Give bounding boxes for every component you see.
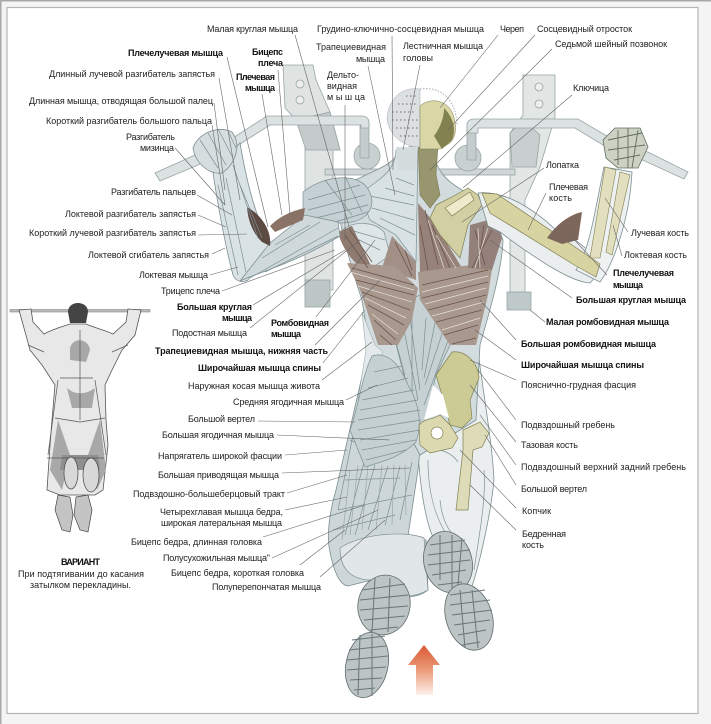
oblique (358, 312, 383, 400)
labels: right: Пояснично-грудная фасция (521, 380, 636, 390)
variant shading (50, 340, 106, 490)
left arm (193, 129, 340, 282)
labels: left and top: Седьмой шейный позвонок (555, 39, 667, 49)
ischium (419, 415, 458, 453)
left forearm (213, 143, 272, 282)
labels: right: кость (549, 193, 572, 203)
radius and ulna (590, 167, 630, 258)
labels: left and top: Длинная мышца, отводящая большой палец (29, 96, 213, 106)
labels: left and top: Локтевая мышца (139, 270, 208, 280)
labels: left and top: мышца (356, 54, 385, 64)
labels: left and top: мышца (245, 83, 276, 93)
variant caption (18, 557, 144, 590)
labels: right (521, 83, 689, 550)
labels: right: Подвздошный верхний задний гребень (521, 462, 686, 472)
cervical spine (418, 143, 440, 208)
left shank (340, 534, 428, 596)
labels: left and top: мышца (271, 329, 302, 339)
variant caption: ВАРИАНТ (61, 557, 100, 567)
brachialis (247, 207, 270, 246)
labels: left and top: Большой вертел (188, 414, 255, 424)
left hand (193, 129, 237, 173)
left leg (328, 350, 428, 597)
labels: right: Широчайшая мышца спины (521, 360, 644, 370)
labels: left and top: Напрягатель широкой фасции (158, 451, 282, 461)
brachioradialis (547, 212, 582, 244)
sole tread (347, 535, 492, 696)
labels: right: Подвздошный гребень (521, 420, 615, 430)
leader lines (175, 35, 628, 577)
triceps fibres and forearm fibres (218, 165, 338, 278)
ilium (436, 352, 479, 428)
labels: right: Бедренная (522, 529, 566, 539)
right leg shading (420, 449, 484, 570)
glute (350, 355, 421, 467)
variant caption: затылком перекладины. (30, 580, 131, 590)
labels: left and top: плеча (258, 58, 284, 68)
fibres (345, 210, 492, 345)
biceps (270, 208, 305, 232)
right teres (468, 218, 502, 270)
figure: main pull-up anatomy (193, 89, 648, 702)
head and skull (387, 89, 457, 170)
humerus (482, 193, 600, 277)
labels: left and top: Длинный лучевой разгибатель запястья (49, 69, 215, 79)
labels: left and top: Средняя ягодичная мышца (233, 397, 344, 407)
labels: left and top: Локтевой сгибатель запястья (88, 250, 209, 260)
labels: right: Ключица (573, 83, 609, 93)
labels: left and top: Грудино-ключично-сосцевидная мышца (317, 24, 484, 34)
right lat (418, 262, 493, 345)
rhomboid left (382, 236, 416, 280)
labels: left and top: Подостная мышца (172, 328, 247, 338)
labels: left and top: Четырехглавая мышца бедра, (160, 507, 283, 517)
labels: left and top: Разгибатель (126, 132, 175, 142)
labels: left and top: Короткий лучевой разгибатель запястья (29, 228, 196, 238)
pelvic opening (424, 385, 449, 420)
labels: left and top: Дельто- (327, 70, 359, 80)
right forearm (576, 167, 632, 282)
labels: left and top: Плечелучевая мышца (128, 48, 224, 58)
variant caption: При подтягивании до касания (18, 569, 144, 579)
labels: left and top: Разгибатель пальцев (111, 187, 196, 197)
right rhomboid (418, 203, 462, 272)
labels: left and top: Малая круглая мышца (207, 24, 298, 34)
labels: left and top: Лестничная мышца (403, 41, 483, 51)
labels: left and top: Полусухожильная мышца" (163, 553, 270, 563)
labels: left and top: Бицепс бедра, длинная головка (131, 537, 262, 547)
labels: right: Лопатка (546, 160, 579, 170)
labels: left and top: Наружная косая мышца живота (188, 381, 320, 391)
skull (420, 101, 456, 149)
left teres (338, 226, 372, 270)
femur (456, 422, 489, 510)
labels: right: Малая ромбовидная мышца (546, 317, 670, 327)
scapula and spine bones (418, 143, 489, 510)
labels: left and top: Трицепс плеча (161, 286, 220, 296)
labels: left and top: широкая латеральная мышца (161, 518, 282, 528)
labels: right: Большая ромбовидная мышца (521, 339, 657, 349)
labels: left and top: Трапециевидная (316, 42, 386, 52)
labels: left and top: Короткий разгибатель большого пальца (46, 116, 212, 126)
lumbar fascia (394, 295, 450, 425)
upward arrow (408, 645, 440, 695)
labels: left and top: Бицепс (252, 47, 283, 57)
labels: left and top: мизинца (140, 143, 174, 153)
labels: left and top: головы (403, 53, 433, 63)
torso (335, 145, 503, 455)
labels: left and top: м ы ш ца (327, 92, 365, 102)
labels: right: мышца (613, 280, 644, 290)
labels: right: кость (522, 540, 544, 550)
variant line details (28, 330, 128, 458)
variant head (68, 303, 88, 323)
labels: left and top: Широчайшая мышца спины (198, 363, 321, 373)
labels: right: Копчик (522, 506, 551, 516)
stipple (392, 96, 418, 136)
right upper arm (478, 193, 600, 283)
left upper arm (240, 215, 340, 281)
labels: left and top: Череп (500, 24, 524, 34)
labels: right: Плечелучевая (613, 268, 674, 278)
labels: left and top: Трапециевидная мышца, нижняя часть (155, 346, 328, 356)
variant bar (10, 310, 150, 312)
labels: left and top: Бицепс бедра, короткая головка (171, 568, 304, 578)
right hand bones (603, 128, 648, 168)
labels: right: Большая круглая мышца (576, 295, 687, 305)
lats and rhomboids (338, 203, 502, 345)
variant shoes (55, 457, 99, 532)
back muscles: trapezius and shoulder (303, 145, 418, 268)
labels: left and top: Сосцевидный отросток (537, 24, 632, 34)
right leg (418, 343, 494, 592)
scapula (430, 188, 482, 258)
variant dark thigh shadow (60, 455, 100, 470)
labels: left and top: Большая круглая (177, 302, 252, 312)
right arm (478, 128, 648, 283)
pull-up machine (155, 65, 688, 310)
labels: left and top: Локтевой разгибатель запястья (65, 209, 196, 219)
variant figure (10, 303, 150, 532)
labels: left and top: Ромбовидная (271, 318, 329, 328)
left thigh fibres (333, 420, 412, 540)
left lat (347, 263, 418, 345)
variant body (19, 309, 141, 495)
labels: right: Большой вертел (521, 484, 587, 494)
labels: left and top: Плечевая (236, 72, 275, 82)
labels: left and top: Большая ягодичная мышца (162, 430, 274, 440)
labels: left and top: Полуперепончатая мышца (212, 582, 321, 592)
labels: right: Плечевая (549, 182, 588, 192)
soles of the feet (340, 526, 501, 702)
labels: left and top (29, 24, 667, 592)
labels: left and top: Большая приводящая мышца (158, 470, 279, 480)
labels: left and top: мышца (222, 313, 253, 323)
labels: left and top: Подвздошно-большеберцовый тракт (133, 489, 285, 499)
labels: right: Тазовая кость (521, 440, 578, 450)
hair (387, 89, 420, 147)
labels: right: Лучевая кость (631, 228, 689, 238)
labels: right: Локтевая кость (624, 250, 687, 260)
labels: left and top: видная (327, 81, 357, 91)
